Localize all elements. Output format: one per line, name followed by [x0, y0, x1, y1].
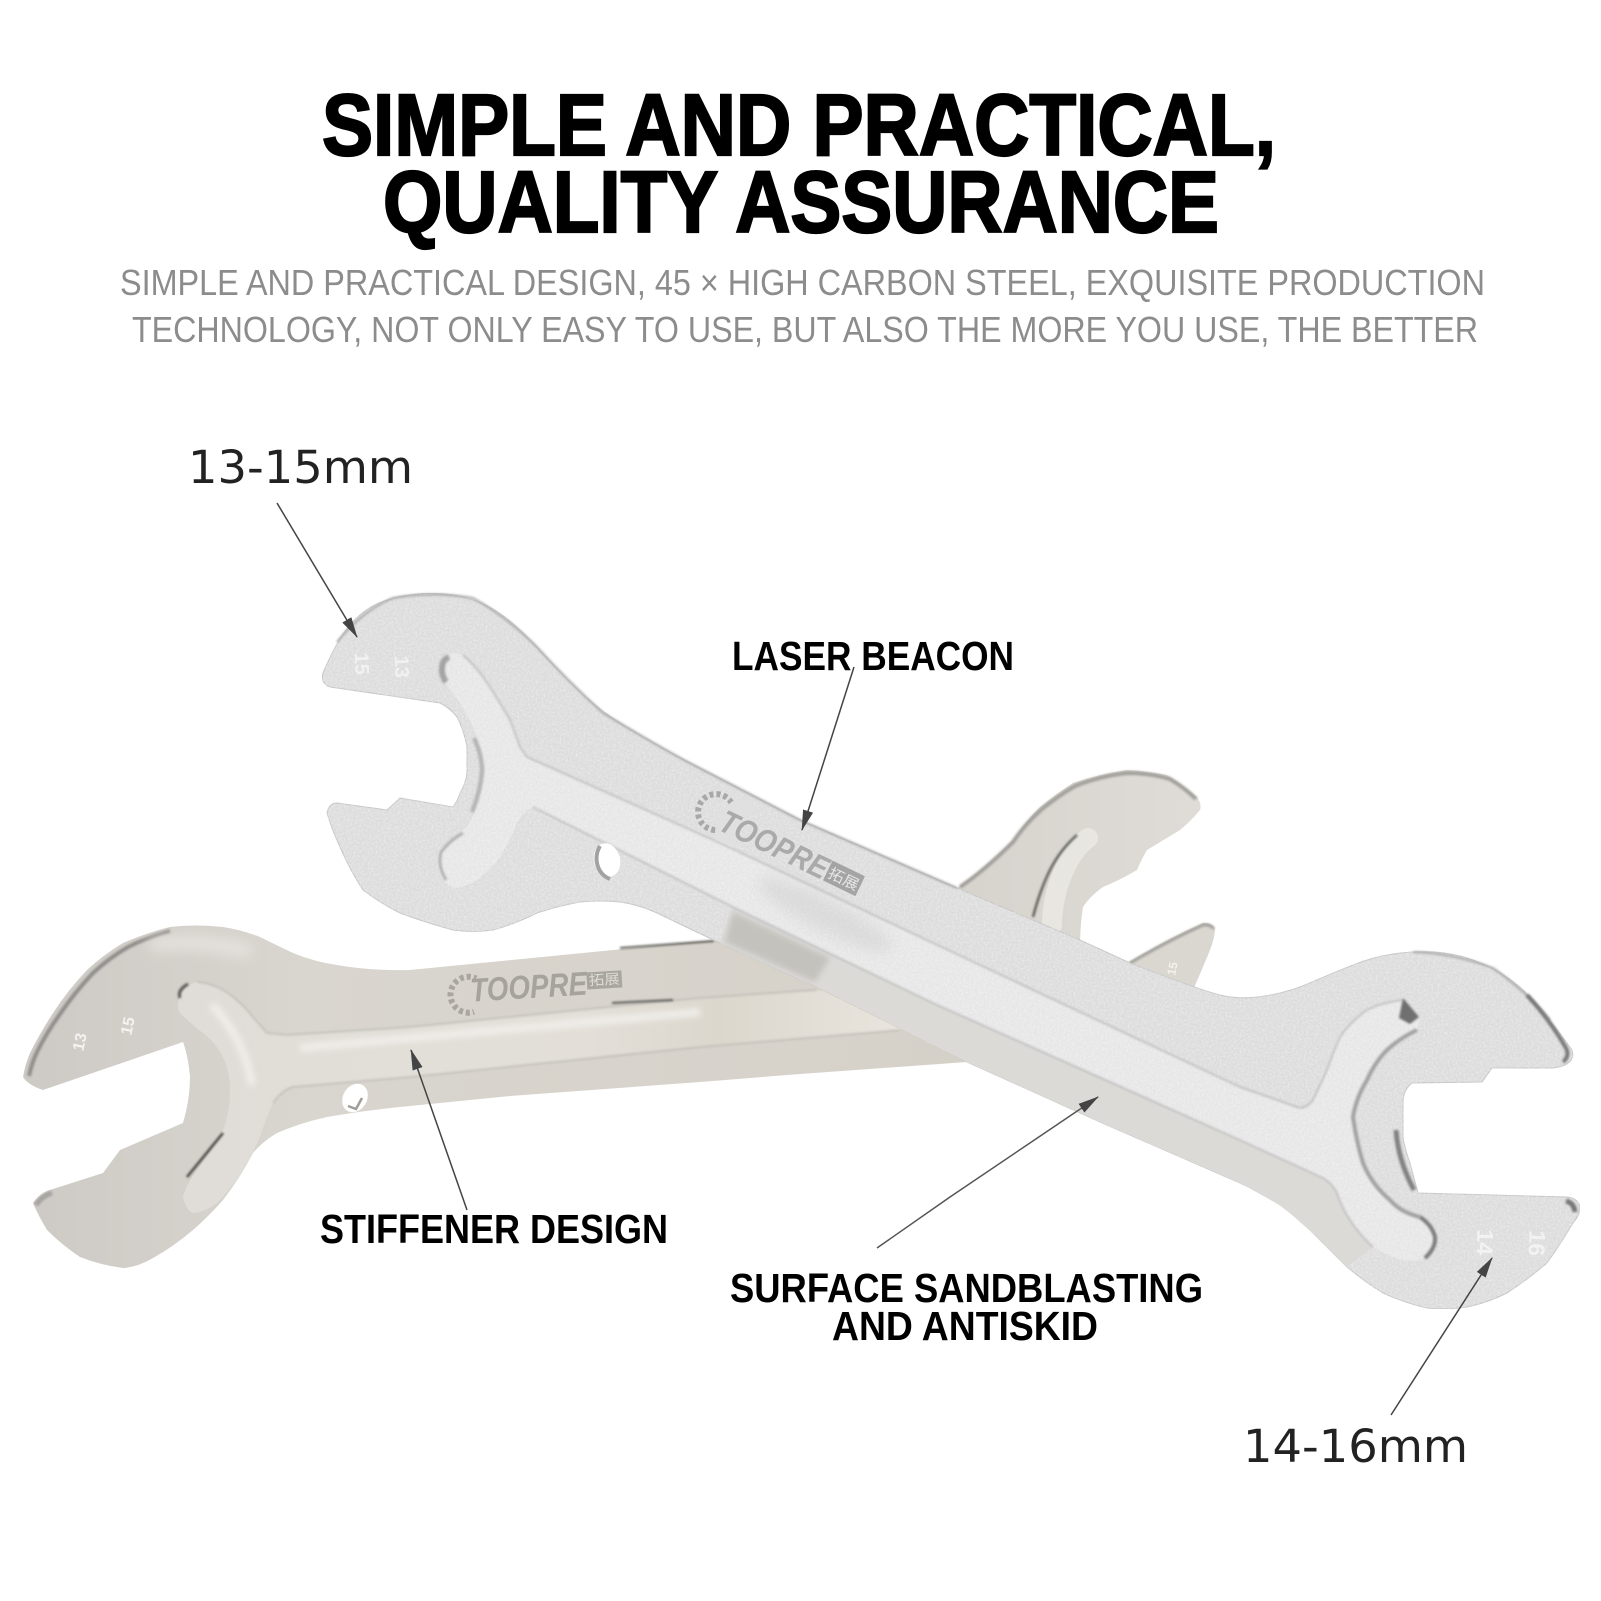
upper wrench [322, 593, 1580, 1309]
upper wrench: size numerals right: 14 [1472, 1229, 1498, 1256]
lower wrench: stiffener dark line [187, 1133, 223, 1177]
upper wrench: TOOPRE logo: 拓展 [825, 865, 861, 894]
label: 14-16mm: 14-16mm [1243, 1420, 1468, 1473]
upper wrench: sandblast shade on ridge [751, 867, 899, 963]
lower wrench: stiffener shadow lines [179, 984, 188, 998]
lower wrench: size numerals: 15 [118, 1015, 139, 1037]
upper wrench: right stiffener dark tip [1399, 998, 1419, 1024]
label: surface sandblasting and antiskid [730, 1265, 1203, 1349]
upper wrench: jaw inner dark band [1396, 1130, 1414, 1190]
lower wrench: far head lower jaw: 15 [1164, 960, 1181, 977]
arrow: surface sandblasting [877, 1097, 1098, 1248]
lower wrench: size numerals [70, 1015, 139, 1053]
upper wrench: lower band [720, 907, 1373, 1267]
title [322, 77, 1276, 251]
lower wrench: stiffener and shaft ridge [178, 982, 930, 1213]
upper wrench: right stiffener end shade [1420, 1217, 1435, 1258]
lower wrench: TOOPRE logo: 拓展 [588, 971, 620, 988]
subtitle text [120, 262, 1485, 350]
lower wrench: far head lower jaw [1127, 923, 1215, 990]
upper wrench: right stiffener inner shade [1353, 1030, 1420, 1217]
lower wrench: main body [23, 926, 967, 1268]
upper wrench: left stiffener lower shade [440, 833, 463, 880]
label: laser beacon: LASER BEACON [732, 633, 1014, 679]
upper wrench: left crescent shade [472, 738, 482, 812]
upper wrench: lower jaw tip shade [1566, 1201, 1575, 1212]
upper wrench: size numerals left: 13 [390, 655, 412, 678]
subtitle text: SIMPLE AND PRACTICAL DESIGN, 45 × HIGH CARBON STEEL, EXQUISITE PRODUCTION [120, 262, 1485, 303]
upper wrench: T ridge and stiffeners [437, 653, 1435, 1261]
arrow: 13-15mm [277, 503, 357, 637]
arrow: 14-16mm [1391, 1258, 1492, 1415]
arrow: stiffener design [411, 1050, 467, 1210]
upper wrench: size numerals right: 16 [1524, 1230, 1550, 1257]
upper wrench: top edge shade [337, 594, 1550, 1020]
lower wrench: ridge soft edges [197, 982, 900, 1103]
upper wrench: TOOPRE logo [689, 784, 872, 905]
lower wrench: dark seam lines [612, 941, 714, 1003]
lower wrench: far head stiffener [1033, 835, 1088, 925]
lower wrench: ridge highlight [212, 1005, 700, 1085]
lower wrench: TOOPRE logo: TOOPRE [469, 965, 589, 1009]
upper wrench: hole [590, 840, 624, 880]
lower wrench: far head outer edge shade [960, 773, 1196, 887]
label: surface sandblasting and antiskid: AND ANTISKID [832, 1303, 1098, 1349]
upper wrench: body [322, 593, 1580, 1309]
upper wrench: upper jaw tip edge [1527, 995, 1567, 1062]
lower wrench: far head upper jaw [945, 770, 1201, 950]
lower wrench: hole [337, 1079, 373, 1117]
arrow: laser beacon [802, 667, 854, 830]
lower wrench: TOOPRE logo [449, 960, 624, 1019]
lower wrench: outer edge bevel [29, 931, 170, 1076]
upper wrench: shaded underside at crossing [725, 912, 830, 982]
lower wrench: lower jaw edge [36, 1193, 52, 1205]
upper wrench: size numerals left [350, 652, 412, 678]
lower wrench: size numerals: 13 [70, 1031, 91, 1053]
title: QUALITY ASSURANCE [383, 154, 1219, 251]
upper wrench: size numerals left: 15 [350, 652, 372, 675]
upper wrench: size numerals right [1472, 1229, 1550, 1257]
title: SIMPLE AND PRACTICAL, [322, 77, 1276, 174]
upper wrench: TOOPRE logo: TOOPRE [714, 803, 836, 887]
lower wrench: head highlight [150, 943, 250, 952]
upper wrench: left stiffener tip shade [442, 657, 449, 682]
label: stiffener design: STIFFENER DESIGN [320, 1206, 668, 1252]
label: 13-15mm: 13-15mm [188, 441, 413, 494]
upper wrench: ridge edge lines [463, 655, 1403, 1247]
subtitle text: TECHNOLOGY, NOT ONLY EASY TO USE, BUT ALSO THE MORE YOU USE, THE BETTER [132, 309, 1478, 350]
lower wrench [23, 770, 1215, 1268]
label: surface sandblasting and antiskid: SURFACE SANDBLASTING [730, 1265, 1203, 1311]
